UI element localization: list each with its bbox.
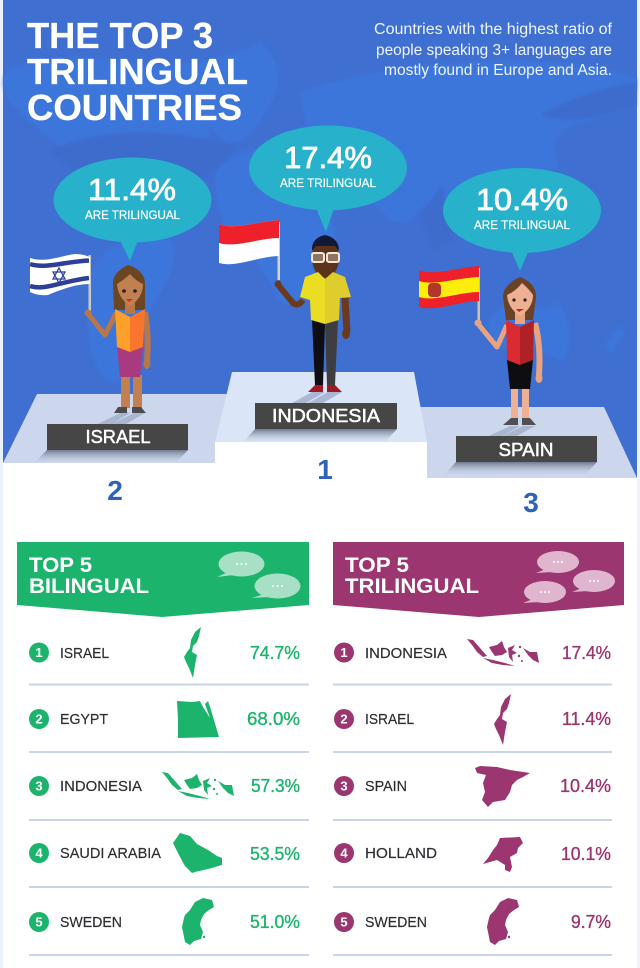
panel: blue hero background with world map xyxy=(3,0,637,480)
rows: INDONESIA xyxy=(60,778,142,795)
bubble: Israel: ARE TRILINGUAL xyxy=(85,208,180,222)
rows: 3 xyxy=(340,778,348,794)
rows: SWEDEN xyxy=(365,914,427,931)
rows: 4 xyxy=(35,846,43,860)
banner: bilingual: TOP 5 xyxy=(29,553,92,577)
bubble: Spain xyxy=(443,168,601,271)
bubble: Israel xyxy=(54,158,212,261)
rows: 3 xyxy=(35,778,43,794)
podium xyxy=(3,372,637,484)
rows: 9.7% xyxy=(571,911,611,932)
rows: ISRAEL xyxy=(365,711,414,728)
intro text xyxy=(374,21,613,79)
rows: 68.0% xyxy=(247,708,300,729)
intro text: people speaking 3+ languages are xyxy=(376,42,612,59)
banner: trilingual xyxy=(333,542,624,617)
rows: 57.3% xyxy=(251,775,300,796)
rows: SPAIN xyxy=(365,778,407,795)
rows: 53.5% xyxy=(250,843,300,864)
flag: Indonesia xyxy=(219,220,280,280)
intro text: Countries with the highest ratio of xyxy=(374,21,613,38)
rows: 11.4% xyxy=(562,708,611,729)
panel: top 5 bilingual xyxy=(17,542,309,955)
bubble: Indonesia: ARE TRILINGUAL xyxy=(280,176,376,190)
rows xyxy=(29,627,309,955)
rows: 5 xyxy=(340,914,348,930)
rows: INDONESIA xyxy=(365,645,447,662)
banner: trilingual: TOP 5 xyxy=(345,553,409,577)
bubble: Indonesia: 17.4% xyxy=(284,141,372,175)
flag: Israel xyxy=(30,254,91,312)
rows: 4 xyxy=(340,846,348,860)
label: Indonesia xyxy=(243,403,397,442)
rank 2: 2 xyxy=(107,475,123,506)
rows: SAUDI ARABIA xyxy=(60,845,161,862)
banner: bilingual xyxy=(17,542,309,617)
rank 3: 3 xyxy=(523,487,539,518)
banner: trilingual: TRILINGUAL xyxy=(345,574,479,598)
figure: Indonesian man xyxy=(274,235,351,403)
rows: 2 xyxy=(340,712,348,726)
rank 1: 1 xyxy=(317,454,333,485)
rows xyxy=(333,639,612,955)
title: TRILINGUAL xyxy=(27,51,248,92)
rows: 10.1% xyxy=(561,843,611,864)
banner: bilingual: BILINGUAL xyxy=(29,574,149,598)
rows: 10.4% xyxy=(560,775,611,796)
rows: 51.0% xyxy=(250,911,300,932)
title: COUNTRIES xyxy=(27,87,242,128)
figure: Israeli woman xyxy=(84,265,150,424)
figure: Spanish woman xyxy=(474,277,542,436)
title: THE TOP 3 xyxy=(27,15,213,56)
bubble: Indonesia xyxy=(249,126,407,232)
panel: top 5 trilingual xyxy=(333,542,624,955)
rows: 1 xyxy=(35,645,43,660)
intro text: mostly found in Europe and Asia. xyxy=(384,62,612,79)
title xyxy=(27,15,248,128)
rows: EGYPT xyxy=(60,711,108,728)
rows: 2 xyxy=(35,712,43,726)
label: Israel xyxy=(34,424,188,463)
rows: ISRAEL xyxy=(60,645,109,662)
rows: 74.7% xyxy=(250,642,300,663)
label: Spain xyxy=(444,436,597,475)
bubble: Israel: 11.4% xyxy=(88,173,176,207)
rows: HOLLAND xyxy=(365,845,437,862)
bubble: Spain: ARE TRILINGUAL xyxy=(474,218,570,232)
flag: Spain xyxy=(419,266,480,323)
rows: 1 xyxy=(340,645,348,660)
label: Indonesia: INDONESIA xyxy=(272,406,380,426)
label: Israel: ISRAEL xyxy=(86,427,150,447)
bubble: Spain: 10.4% xyxy=(476,183,568,217)
label: Spain: SPAIN xyxy=(498,440,554,460)
rows: 17.4% xyxy=(562,642,611,663)
rows: SWEDEN xyxy=(60,914,122,931)
rows: 5 xyxy=(35,914,43,930)
